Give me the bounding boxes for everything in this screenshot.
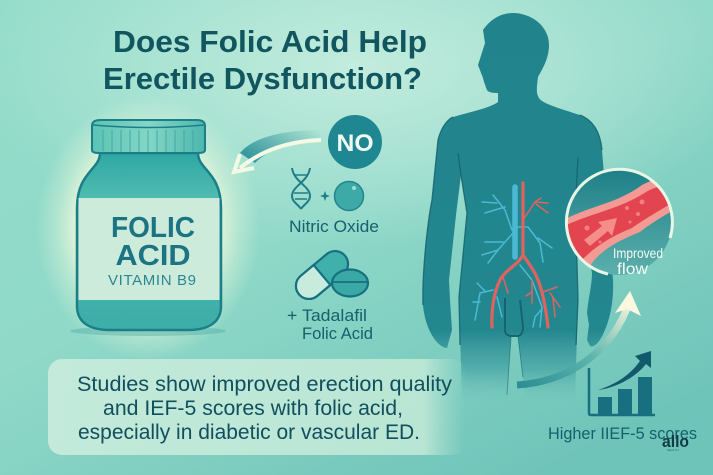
panel text	[77, 373, 452, 444]
panel text: especially in diabetic or vascular ED.	[78, 421, 420, 444]
bottle label text: ACID	[116, 240, 190, 272]
label: tadalafil folic acid	[287, 307, 373, 343]
arteries	[492, 183, 560, 327]
panel text: and IEF-5 scores with folic acid,	[103, 397, 403, 420]
jar glow	[36, 96, 260, 360]
human body silhouette	[423, 13, 613, 400]
icon: folic acid bottle	[70, 120, 226, 336]
veins	[473, 187, 552, 327]
label: tadalafil folic acid: + Tadalafil	[287, 307, 367, 325]
panel text: Studies show improved erection quality	[77, 373, 452, 396]
logo: allo health: allo	[662, 432, 689, 451]
magnified artery inset	[564, 168, 674, 276]
label: higher IIEF-5 scores: Higher IIEF-5 scores	[548, 424, 697, 443]
arrow: upward curve	[517, 291, 641, 385]
title: Erectile Dysfunction?	[103, 61, 422, 96]
icon: DNA and molecule	[292, 168, 364, 210]
inset caption: flow	[617, 261, 648, 278]
bottle label text	[108, 212, 196, 289]
text panel	[48, 359, 466, 455]
NO badge: NO	[336, 130, 374, 157]
bottle cap	[92, 120, 205, 153]
label: tadalafil folic acid: Folic Acid	[302, 325, 373, 343]
bottle label text: FOLIC	[111, 212, 195, 244]
NO badge	[328, 115, 382, 169]
icon: capsule and tablet	[291, 246, 368, 304]
logo: allo health: HEALTH	[667, 448, 679, 452]
bottle label	[78, 198, 220, 300]
icon: bar chart with rising arrow	[589, 351, 655, 415]
bottle label text: VITAMIN B9	[108, 272, 196, 289]
title	[103, 24, 427, 96]
inset caption: Improved	[613, 246, 663, 261]
title: Does Folic Acid Help	[113, 24, 427, 59]
arrow: NO to bottle	[234, 130, 321, 172]
inset caption	[613, 246, 663, 278]
blood vessels	[473, 183, 560, 327]
label: nitric oxide: Nitric Oxide	[289, 218, 379, 236]
